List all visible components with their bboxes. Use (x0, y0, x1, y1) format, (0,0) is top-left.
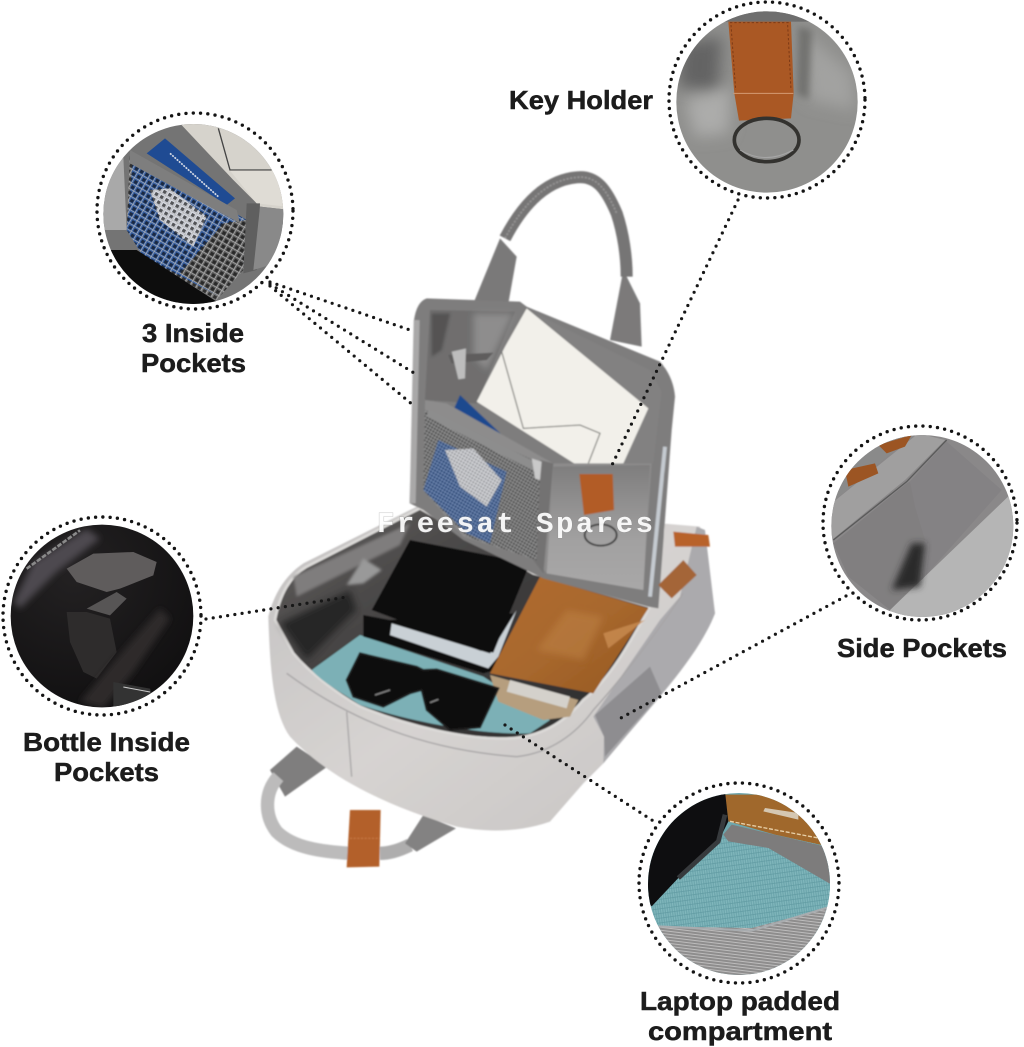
bag interior (275, 508, 650, 738)
inner wall light folds (280, 523, 410, 660)
inset: laptop padded compartment (635, 778, 845, 991)
shoulder strap leather patch (658, 560, 697, 598)
flap outer shell (410, 298, 675, 608)
dotted leader: key holder (612, 200, 738, 465)
flap leather tab (579, 474, 614, 515)
white pages binder (363, 613, 513, 673)
dotted leader: side pocket (619, 596, 846, 719)
white notebook (477, 308, 648, 465)
label: Bottle Inside Pockets: Bottle Inside (23, 727, 190, 757)
label: 3 Inside Pockets: 3 Inside (142, 318, 244, 348)
top carry handle (473, 177, 642, 347)
upper pocket zipper (448, 348, 493, 379)
shoulder strap leather tab (673, 532, 710, 547)
passport top (448, 395, 528, 462)
inset: bottle pockets (0, 512, 210, 719)
backpack illustration (267, 177, 715, 867)
flap key ring (585, 524, 617, 546)
label: Bottle Inside Pockets: Pockets (54, 757, 159, 787)
flap lining upper-right (535, 313, 662, 463)
dotted leader: inside pocket middle (270, 284, 414, 373)
dotted leader: bottle pocket (206, 597, 347, 619)
label: Bottle Inside Pockets (23, 727, 190, 787)
inset: 3 inside pockets (90, 110, 300, 317)
dotted leader: inside pocket upper (270, 282, 413, 331)
brown wallet (490, 577, 648, 720)
side pocket (595, 667, 662, 757)
bag outer shell (268, 503, 715, 830)
label: Laptop padded compartment: Laptop padded (640, 986, 840, 1016)
flap left light edge (413, 320, 417, 503)
label: Laptop padded compartment (640, 986, 840, 1046)
label: Laptop padded compartment: compartment (648, 1016, 832, 1046)
sunglasses (347, 653, 498, 730)
label: Side Pockets: Side Pockets (837, 633, 1007, 663)
inset: side pockets (815, 420, 1024, 633)
dotted leader: inside pocket lower (270, 286, 413, 405)
front seam (287, 593, 683, 777)
mesh pocket with passport (423, 408, 542, 560)
backpack lower body (267, 503, 715, 867)
inset: key holder (665, 0, 872, 200)
bottom carry handle (267, 747, 456, 867)
dotted leader: laptop compartment (505, 725, 658, 824)
lower flap fabric (423, 400, 652, 590)
right side face (593, 527, 715, 763)
watermark: Freesat Spares (377, 508, 653, 541)
label: 3 Inside Pockets: Pockets (141, 348, 246, 378)
flap pale edge (650, 447, 665, 597)
flap lining upper-left (425, 310, 515, 403)
backpack upper flap (410, 177, 710, 608)
black folder (372, 540, 530, 653)
label: Key Holder: Key Holder (509, 85, 653, 115)
teal laptop padding (312, 635, 550, 733)
label: 3 Inside Pockets (141, 318, 246, 378)
